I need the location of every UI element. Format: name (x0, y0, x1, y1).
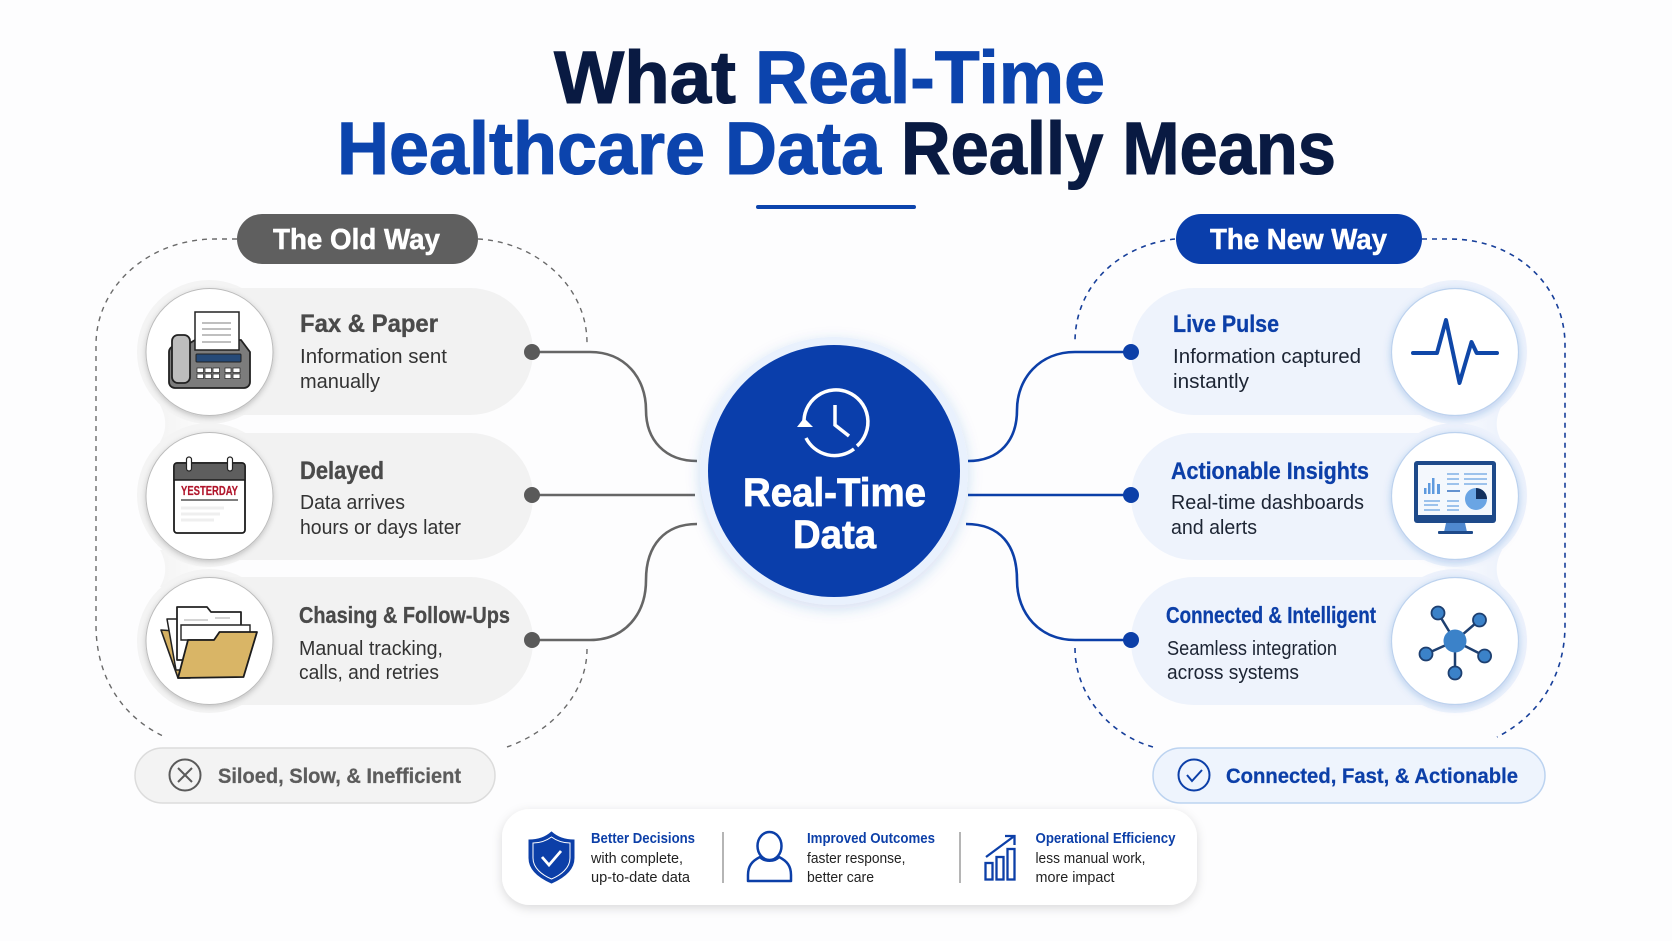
row: Delayed: hours or days later (300, 517, 461, 539)
row: Delayed: Data arrives (300, 492, 405, 514)
row: Chasing & Follow-Ups (146, 578, 540, 704)
icon: dashboard monitor (1392, 432, 1518, 560)
panel: benefits (502, 809, 1197, 905)
panel: new way rows background (1131, 280, 1527, 713)
pill: The New Way: The New Way (1210, 224, 1387, 256)
icon: person (748, 832, 791, 881)
benefit: operational efficiency: Operational Efficiency (1036, 831, 1176, 847)
pill: The Old Way (237, 214, 478, 264)
connector dot (1123, 632, 1139, 648)
benefit: improved outcomes (807, 831, 935, 886)
benefit: operational efficiency: more impact (1036, 870, 1114, 886)
benefit: operational efficiency: less manual work, (1036, 851, 1146, 867)
icon: growth chart (986, 836, 1014, 880)
benefit: better decisions: up-to-date data (591, 870, 691, 886)
title: Healthcare Data (337, 107, 882, 190)
center hub: Real-Time Data: Data (793, 513, 877, 557)
row: Actionable Insights (1123, 432, 1518, 560)
row: Fax & Paper: Information sent (300, 346, 447, 368)
row: Connected & Intelligent: across systems (1167, 662, 1299, 684)
row: Fax & Paper (146, 288, 540, 416)
pill: The Old Way: The Old Way (273, 224, 440, 256)
row: Connected & Intelligent (1123, 578, 1518, 704)
summary pill: siloed, slow, inefficient (135, 748, 495, 803)
icon: clock with arrow (797, 390, 868, 456)
benefit: improved outcomes: better care (807, 870, 874, 886)
icon: shield check (529, 832, 574, 883)
icon: calendar yesterday (146, 432, 273, 560)
row: Connected & Intelligent: Seamless integration (1167, 638, 1337, 660)
row: Fax & Paper: Fax & Paper (300, 310, 438, 338)
title (337, 36, 1336, 190)
benefit: better decisions: Better Decisions (591, 831, 695, 847)
summary pill: connected, fast, actionable: Connected, Fast, & Actionable (1226, 765, 1518, 788)
row: Fax & Paper: manually (300, 371, 380, 393)
panel: new way dashed outline (1075, 239, 1565, 747)
row: Live Pulse: Live Pulse (1173, 311, 1279, 338)
connector lines: new way (966, 352, 1132, 640)
row: Actionable Insights: Actionable Insights (1171, 458, 1369, 485)
row: Actionable Insights: and alerts (1171, 517, 1257, 539)
icon: x circle (170, 760, 200, 790)
icon: calendar yesterday: YESTERDAY (181, 484, 238, 498)
title: Real-Time (755, 36, 1105, 119)
row: Actionable Insights: Real-time dashboards (1171, 492, 1364, 514)
icon: overflowing folder (146, 578, 273, 704)
benefit: improved outcomes: faster response, (807, 851, 906, 867)
center hub: Real-Time Data (700, 337, 968, 605)
summary pill: siloed, slow, inefficient: Siloed, Slow, & Inefficient (218, 765, 461, 788)
icon: fax machine (146, 288, 273, 416)
center hub: Real-Time Data: Real-Time (743, 471, 926, 515)
connector dot (524, 487, 540, 503)
icon: pulse line (1392, 288, 1518, 416)
connector dot (1123, 344, 1139, 360)
row: Live Pulse: instantly (1173, 371, 1249, 393)
title: Really Means (901, 107, 1336, 190)
connector lines: old way (532, 352, 697, 640)
icon: network nodes (1392, 578, 1518, 704)
row: Connected & Intelligent: Connected & Intelligent (1166, 602, 1376, 628)
connector dot (524, 344, 540, 360)
row: Delayed: Delayed (300, 457, 384, 485)
benefit: operational efficiency (1036, 831, 1176, 886)
panel: old way rows background (137, 280, 533, 713)
benefit: better decisions: with complete, (590, 851, 683, 867)
icon: check circle (1178, 760, 1210, 790)
row: Chasing & Follow-Ups: Chasing & Follow-Ups (299, 602, 510, 628)
benefit: better decisions (590, 831, 695, 886)
connector dot (524, 632, 540, 648)
row: Delayed (146, 432, 540, 560)
row: Live Pulse: Information captured (1173, 346, 1361, 368)
title: What (554, 36, 736, 119)
row: Chasing & Follow-Ups: Manual tracking, (299, 638, 443, 660)
panel: old way dashed outline (96, 239, 587, 747)
benefit: improved outcomes: Improved Outcomes (807, 831, 935, 847)
row: Chasing & Follow-Ups: calls, and retries (299, 662, 439, 684)
row: Live Pulse (1123, 288, 1518, 416)
pill: The New Way (1176, 214, 1422, 264)
connector dot (1123, 487, 1139, 503)
summary pill: connected, fast, actionable (1153, 748, 1545, 803)
